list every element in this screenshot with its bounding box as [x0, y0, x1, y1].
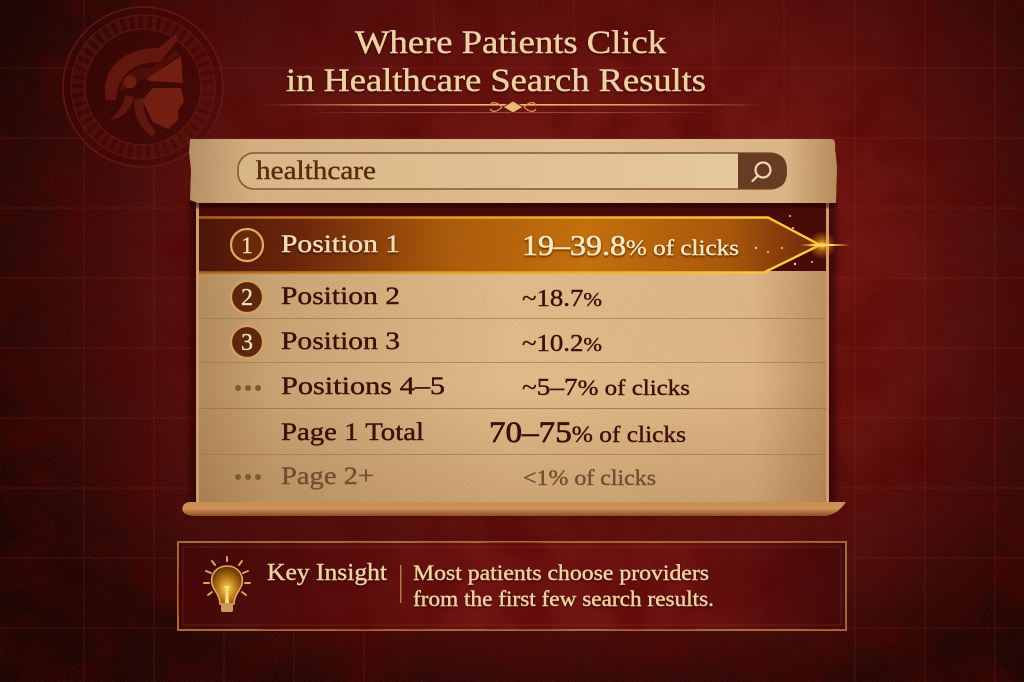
row: position 2: Position 2 — [281, 283, 400, 310]
title: in Healthcare Search Results — [286, 63, 706, 99]
row: page 1 total: Page 1 Total — [281, 419, 424, 446]
scroll parchment body — [196, 203, 829, 505]
insight text: from the first few search results. — [413, 586, 714, 611]
icon: light bulb — [204, 557, 250, 612]
scroll bottom rod — [182, 502, 846, 516]
badge 1 — [231, 229, 263, 261]
label: position 1: Position 1 — [281, 231, 400, 258]
search query text: healthcare — [256, 156, 376, 185]
insight text — [413, 560, 714, 611]
row: positions 4-5 — [235, 373, 690, 401]
heading: key insight: Key Insight — [267, 560, 387, 586]
badge 1: 1 — [241, 233, 253, 258]
row: position 3 — [231, 326, 602, 358]
title: Where Patients Click — [355, 25, 667, 61]
scroll header with search bar — [189, 139, 837, 208]
panel: key insight callout — [178, 542, 846, 630]
row: page 1 total — [281, 416, 686, 449]
dark band under header — [199, 203, 826, 271]
scroll body shadow — [190, 200, 836, 515]
row: position 2: ~18.7 % — [522, 286, 602, 312]
row: position 2: 2 — [241, 285, 253, 311]
row: positions 4-5: ~5–7 % of clicks — [522, 375, 690, 401]
emblem: Spartan warrior medallion — [63, 7, 223, 167]
title ornament divider — [262, 101, 762, 113]
emblem helmet — [105, 34, 178, 100]
search field — [238, 153, 787, 189]
row: position 3: ~10.2 % — [522, 331, 602, 357]
row: position 3: 3 — [241, 330, 253, 356]
value: position 1 clicks: 19–39.8 % of clicks — [522, 231, 739, 262]
insight text: Most patients choose providers — [413, 560, 709, 585]
row: page 2+: <1% of clicks — [523, 465, 656, 490]
row: page 2+ — [235, 463, 656, 490]
row: position 3: Position 3 — [281, 328, 400, 355]
panel: search results scroll — [182, 139, 850, 516]
title — [286, 25, 706, 99]
row: position 1 highlight — [199, 215, 850, 272]
row: page 2+: Page 2+ — [281, 463, 374, 490]
row: position 2 — [231, 281, 602, 313]
row: positions 4-5: Positions 4–5 — [281, 373, 445, 400]
emblem face — [142, 56, 184, 129]
search button — [738, 153, 787, 189]
row: page 1 total: 70–75 % of clicks — [489, 416, 686, 449]
